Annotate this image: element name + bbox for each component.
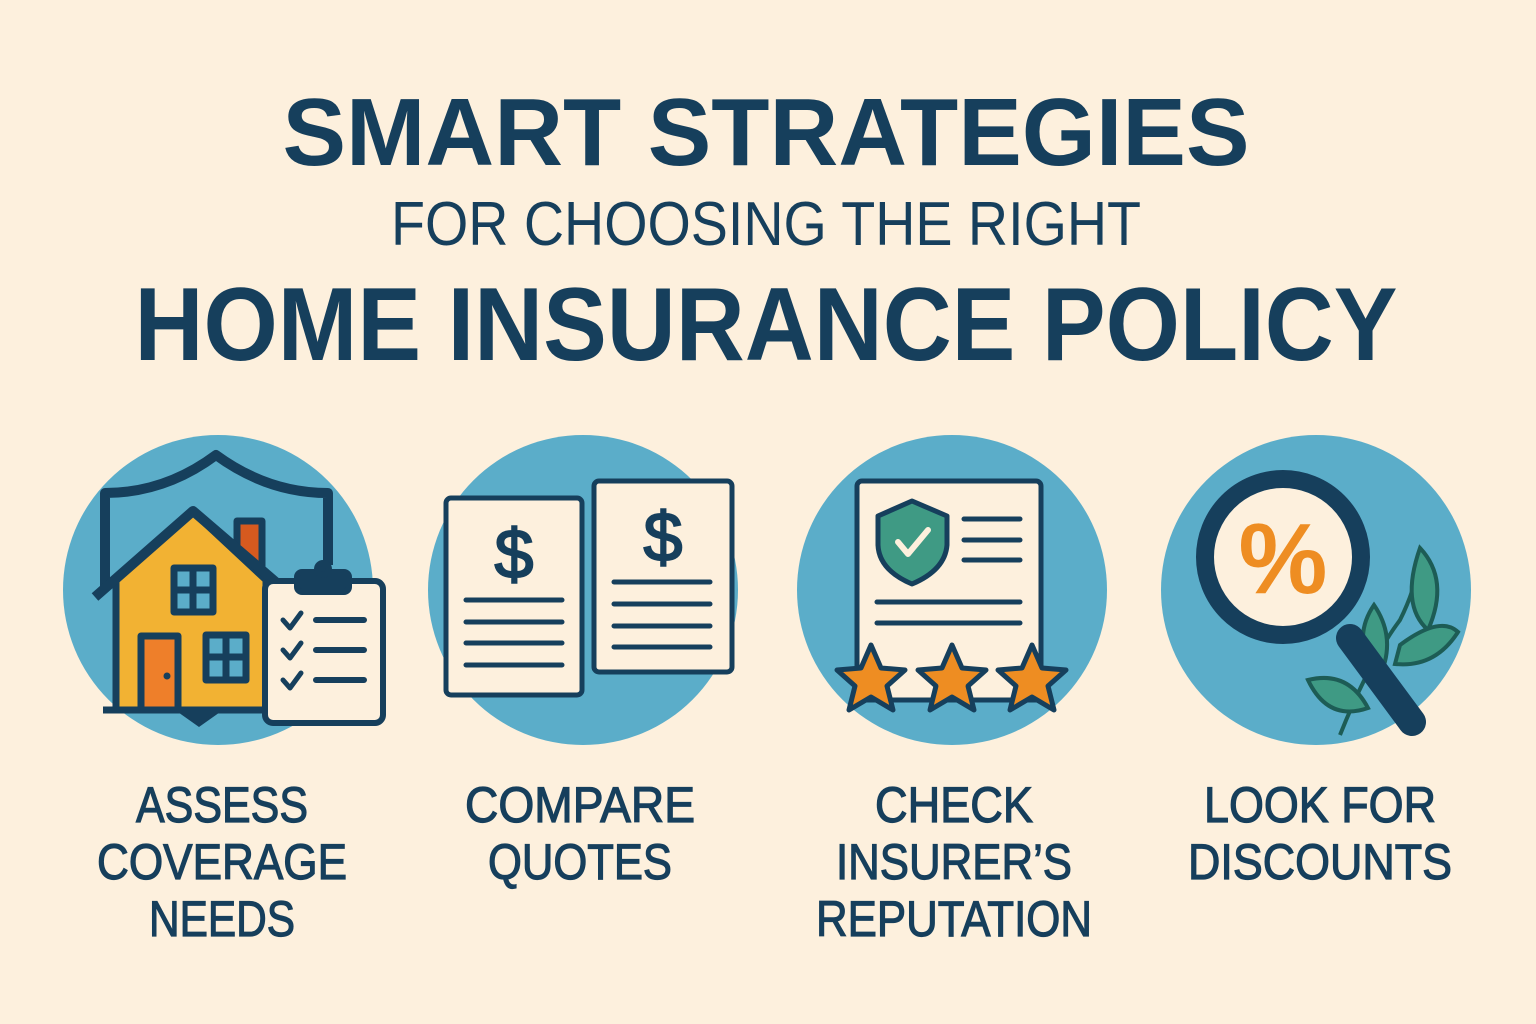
panel: check reputation	[797, 435, 1107, 745]
label: compare quotes: QUOTES	[488, 834, 672, 890]
label: look for discounts: DISCOUNTS	[1188, 834, 1452, 890]
label: compare quotes: COMPARE	[465, 777, 695, 833]
title: FOR CHOOSING THE RIGHT	[391, 190, 1141, 259]
icon: shield around house	[105, 455, 328, 590]
icon: reputation document	[857, 481, 1041, 700]
panel: look for discounts	[1161, 435, 1471, 745]
icon: magnifying glass	[1205, 479, 1412, 722]
title: HOME INSURANCE POLICY	[134, 267, 1398, 383]
label: assess coverage needs	[97, 777, 347, 947]
panel: look for discounts: %	[1239, 503, 1327, 615]
label: look for discounts	[1188, 777, 1452, 890]
icon: house	[95, 511, 285, 710]
title	[134, 79, 1398, 383]
panel: assess coverage	[63, 435, 383, 745]
label: compare quotes	[465, 777, 695, 890]
icon: clipboard	[265, 563, 383, 723]
icon: quote documents	[446, 481, 732, 695]
panel: compare quotes: $	[644, 498, 682, 576]
label: assess coverage needs: ASSESS	[136, 777, 308, 833]
icon: leaves	[1308, 548, 1458, 735]
label: look for discounts: LOOK FOR	[1204, 777, 1436, 833]
label: assess coverage needs: COVERAGE	[97, 834, 347, 890]
label: check insurer's reputation	[816, 777, 1092, 947]
label: check insurer's reputation: INSURER’S	[836, 834, 1072, 890]
label: check insurer's reputation: REPUTATION	[816, 891, 1092, 947]
labels	[97, 777, 1452, 947]
label: assess coverage needs: NEEDS	[149, 891, 295, 947]
panel: compare quotes: $	[495, 515, 533, 593]
title: SMART STRATEGIES	[282, 79, 1250, 186]
label: check insurer's reputation: CHECK	[875, 777, 1033, 833]
panel: compare quotes	[428, 435, 738, 745]
icon: stars	[837, 645, 1066, 710]
